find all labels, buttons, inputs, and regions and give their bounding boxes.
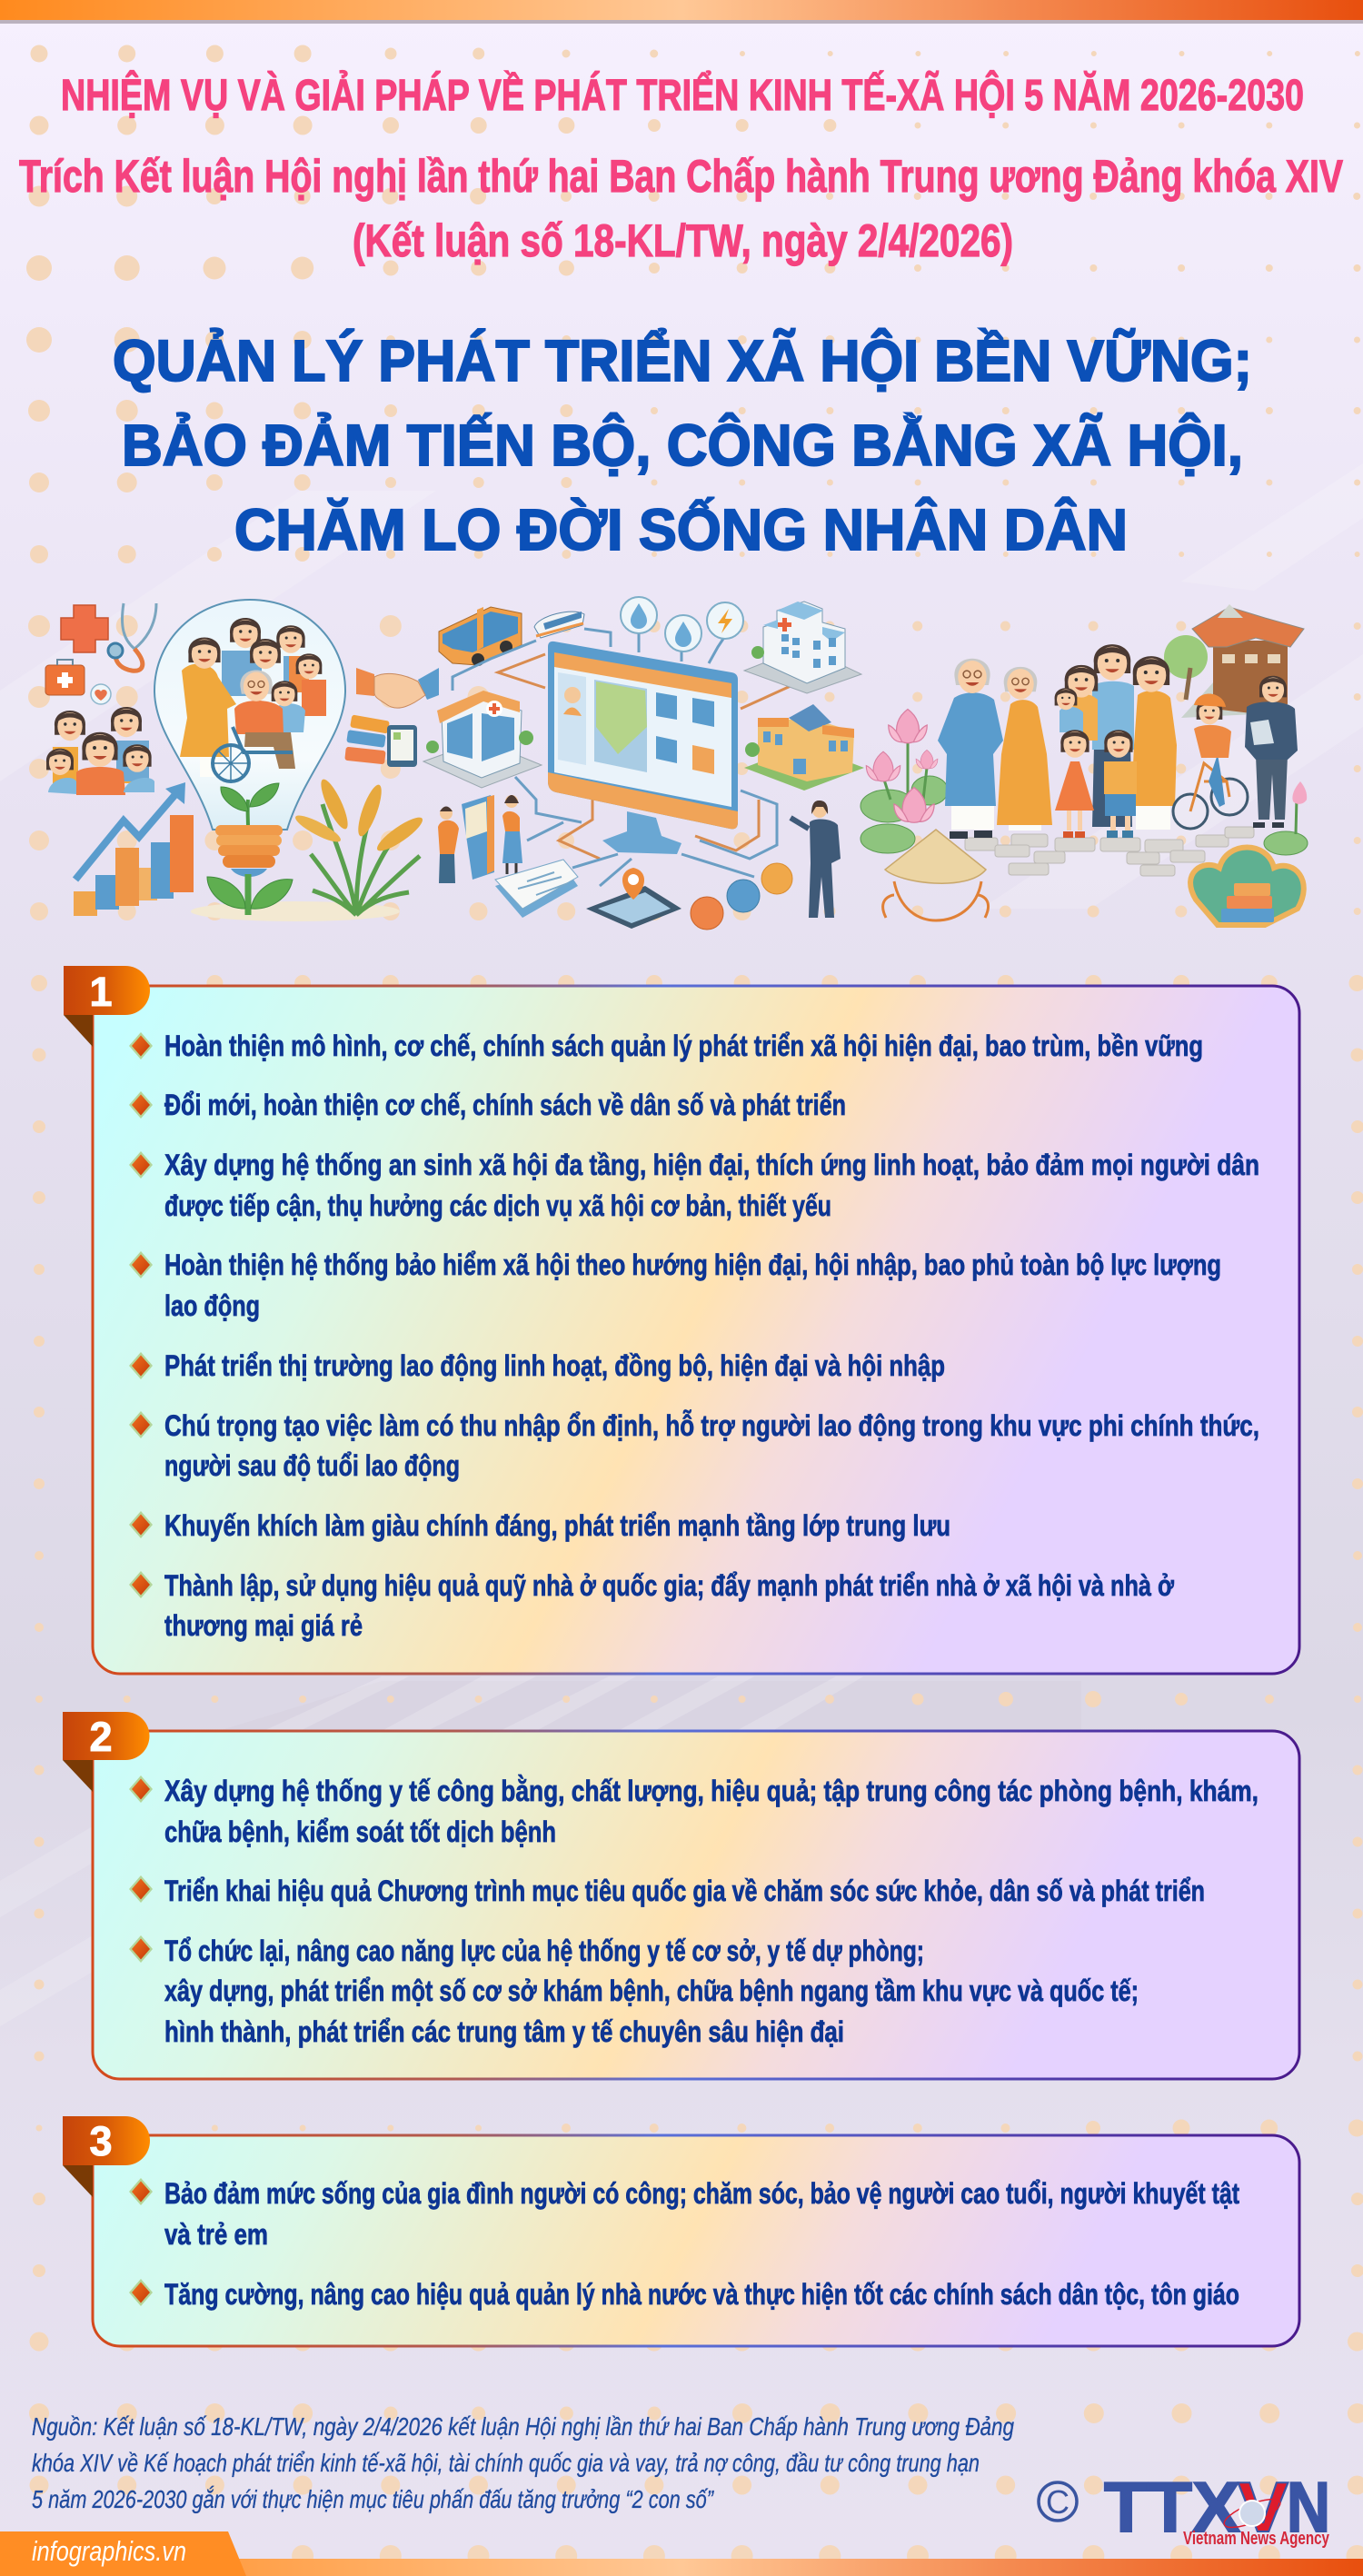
panel 2: healthcare (63, 1712, 1299, 2079)
icon: light bulb with family and plant (154, 600, 400, 921)
icon: presenter (791, 801, 841, 918)
source note: 5 năm 2026-2030 gắn với thực hiện mục tiêu phấn đấu tăng trưởng “2 con số” (32, 2485, 714, 2513)
panel 3 fold (63, 2165, 93, 2197)
icon: growth bar chart with arrow (74, 782, 194, 916)
item: living standards: và trẻ em (164, 2218, 268, 2251)
icon: family of five (46, 707, 154, 795)
icon: handshake (356, 668, 439, 708)
panel 3 box (93, 2135, 1299, 2346)
item: jobs: người sau độ tuổi lao động (164, 1449, 460, 1482)
subtitle line: conclusion number: (Kết luận số 18-KL/TW, ngày 2/4/2026) (353, 215, 1013, 266)
icon: train (534, 612, 584, 638)
source note: khóa XIV về Kế hoạch phát triển kinh tế-xã hội, tài chính quốc gia và vay, trả nợ công, đầu tư công trung hạn (32, 2449, 980, 2477)
panel 2 fold (63, 1760, 93, 1792)
icon: coins (691, 863, 792, 930)
main heading: CHĂM LO ĐỜI SỐNG NHÂN DÂN (234, 496, 1128, 562)
icon: people at kiosk (438, 795, 522, 883)
globe (1221, 2493, 1283, 2533)
icon: hospital right (744, 602, 861, 693)
icon: temple and tree (1164, 604, 1304, 718)
panel 2 number tag: 2 (89, 1714, 113, 1760)
logo: TTXVN: V (1238, 2467, 1288, 2547)
item: reorganise healthcare: Tổ chức lại, nâng cao năng lực của hệ thống y tế cơ sở, y tế dự phòng; (164, 1934, 924, 1967)
panel 1 fold (64, 1015, 93, 1047)
copyright mark (1039, 2482, 1077, 2521)
icon: conical hat (883, 830, 989, 920)
item: social insurance: lao động (164, 1289, 260, 1322)
group in bulb (180, 618, 326, 781)
icon: stepping stones (965, 827, 1254, 876)
item: reorganise healthcare (129, 1934, 1139, 2048)
group: man in suit (1245, 676, 1298, 828)
icon: monitor (548, 642, 738, 854)
title block (19, 70, 1343, 266)
item: social security: được tiếp cận, thụ hưởng các dịch vụ xã hội cơ bản, thiết yếu (164, 1189, 831, 1222)
panel 3 number tag (63, 2116, 150, 2165)
panel 1 box (93, 986, 1299, 1674)
icon: medical cross, stethoscope and bag (45, 603, 156, 704)
icon: paper stack (495, 860, 578, 918)
item: living standards (129, 2177, 1239, 2251)
icon: rice plant (293, 776, 426, 915)
panel 3: living standards and policy (63, 2116, 1299, 2346)
sprout and base (246, 800, 250, 829)
icon: connection lines (453, 629, 791, 886)
item: jobs (129, 1409, 1259, 1482)
item: health system: chữa bệnh, kiểm soát tốt dịch bệnh (164, 1815, 556, 1848)
item: housing: thương mại giá rẻ (164, 1609, 363, 1642)
icon: small hospital (423, 691, 542, 788)
logo: TTXVN: TTX (1104, 2467, 1240, 2547)
main heading: BẢO ĐẢM TIẾN BỘ, CÔNG BẰNG XÃ HỘI, (122, 412, 1243, 478)
item: social security (129, 1149, 1259, 1222)
icon: cloud with books (1190, 847, 1304, 925)
panel 1 number tag (64, 966, 150, 1015)
icon: phone with location pin (586, 868, 682, 929)
icon: books and tablet (344, 714, 417, 767)
panel 1 number tag: 1 (89, 969, 113, 1015)
logo: TTXVN: N (1287, 2467, 1330, 2547)
icon: bus (439, 607, 522, 666)
item: reorganise healthcare: hình thành, phát triển các trung tâm y tế chuyên sâu hiện đại (164, 2015, 844, 2048)
group: parents and children (1055, 644, 1177, 838)
footer tab: infographics.vn: infographics.vn (32, 2535, 186, 2567)
panel 1: social management and welfare (64, 966, 1299, 1674)
icon: lotus flowers (861, 709, 948, 853)
item: middle class: Khuyến khích làm giàu chính đáng, phát triển mạnh tầng lớp trung lưu (164, 1509, 950, 1542)
item: labour market: Phát triển thị trường lao động linh hoạt, đồng bộ, hiện đại và hội nhập (164, 1349, 945, 1382)
item: social insurance (129, 1248, 1221, 1322)
item: population policy: Đổi mới, hoàn thiện cơ chế, chính sách về dân số và phát triển (164, 1089, 846, 1121)
group: cyclist child (1173, 693, 1248, 829)
source note: Nguồn: Kết luận số 18-KL/TW, ngày 2/4/2026 kết luận Hội nghị lần thứ hai Ban Chấp hành Trung ương Đảng (32, 2412, 1014, 2441)
panel 2 box (93, 1731, 1299, 2079)
top orange bar (0, 0, 1363, 24)
source note (32, 2412, 1014, 2513)
footer tab: infographics.vn (0, 2531, 246, 2576)
icon: school (744, 704, 864, 791)
illustration band (45, 597, 1308, 930)
main heading (113, 327, 1252, 562)
item: housing (129, 1569, 1174, 1642)
panel 2 number tag (63, 1712, 149, 1760)
background diagonal stripes (0, 463, 1363, 2026)
panel 3 number tag: 3 (89, 2118, 113, 2164)
bottom bar (0, 2559, 1363, 2576)
group: grandparents (938, 659, 1052, 839)
icon: utility bubbles (621, 597, 743, 651)
logo: TTXVN (1039, 2467, 1330, 2549)
copyright mark: C (1046, 2483, 1070, 2521)
main heading: QUẢN LÝ PHÁT TRIỂN XÃ HỘI BỀN VỮNG; (113, 327, 1252, 393)
icon: small lotus bud and leaf (1264, 781, 1308, 855)
item: health system (129, 1775, 1259, 1848)
